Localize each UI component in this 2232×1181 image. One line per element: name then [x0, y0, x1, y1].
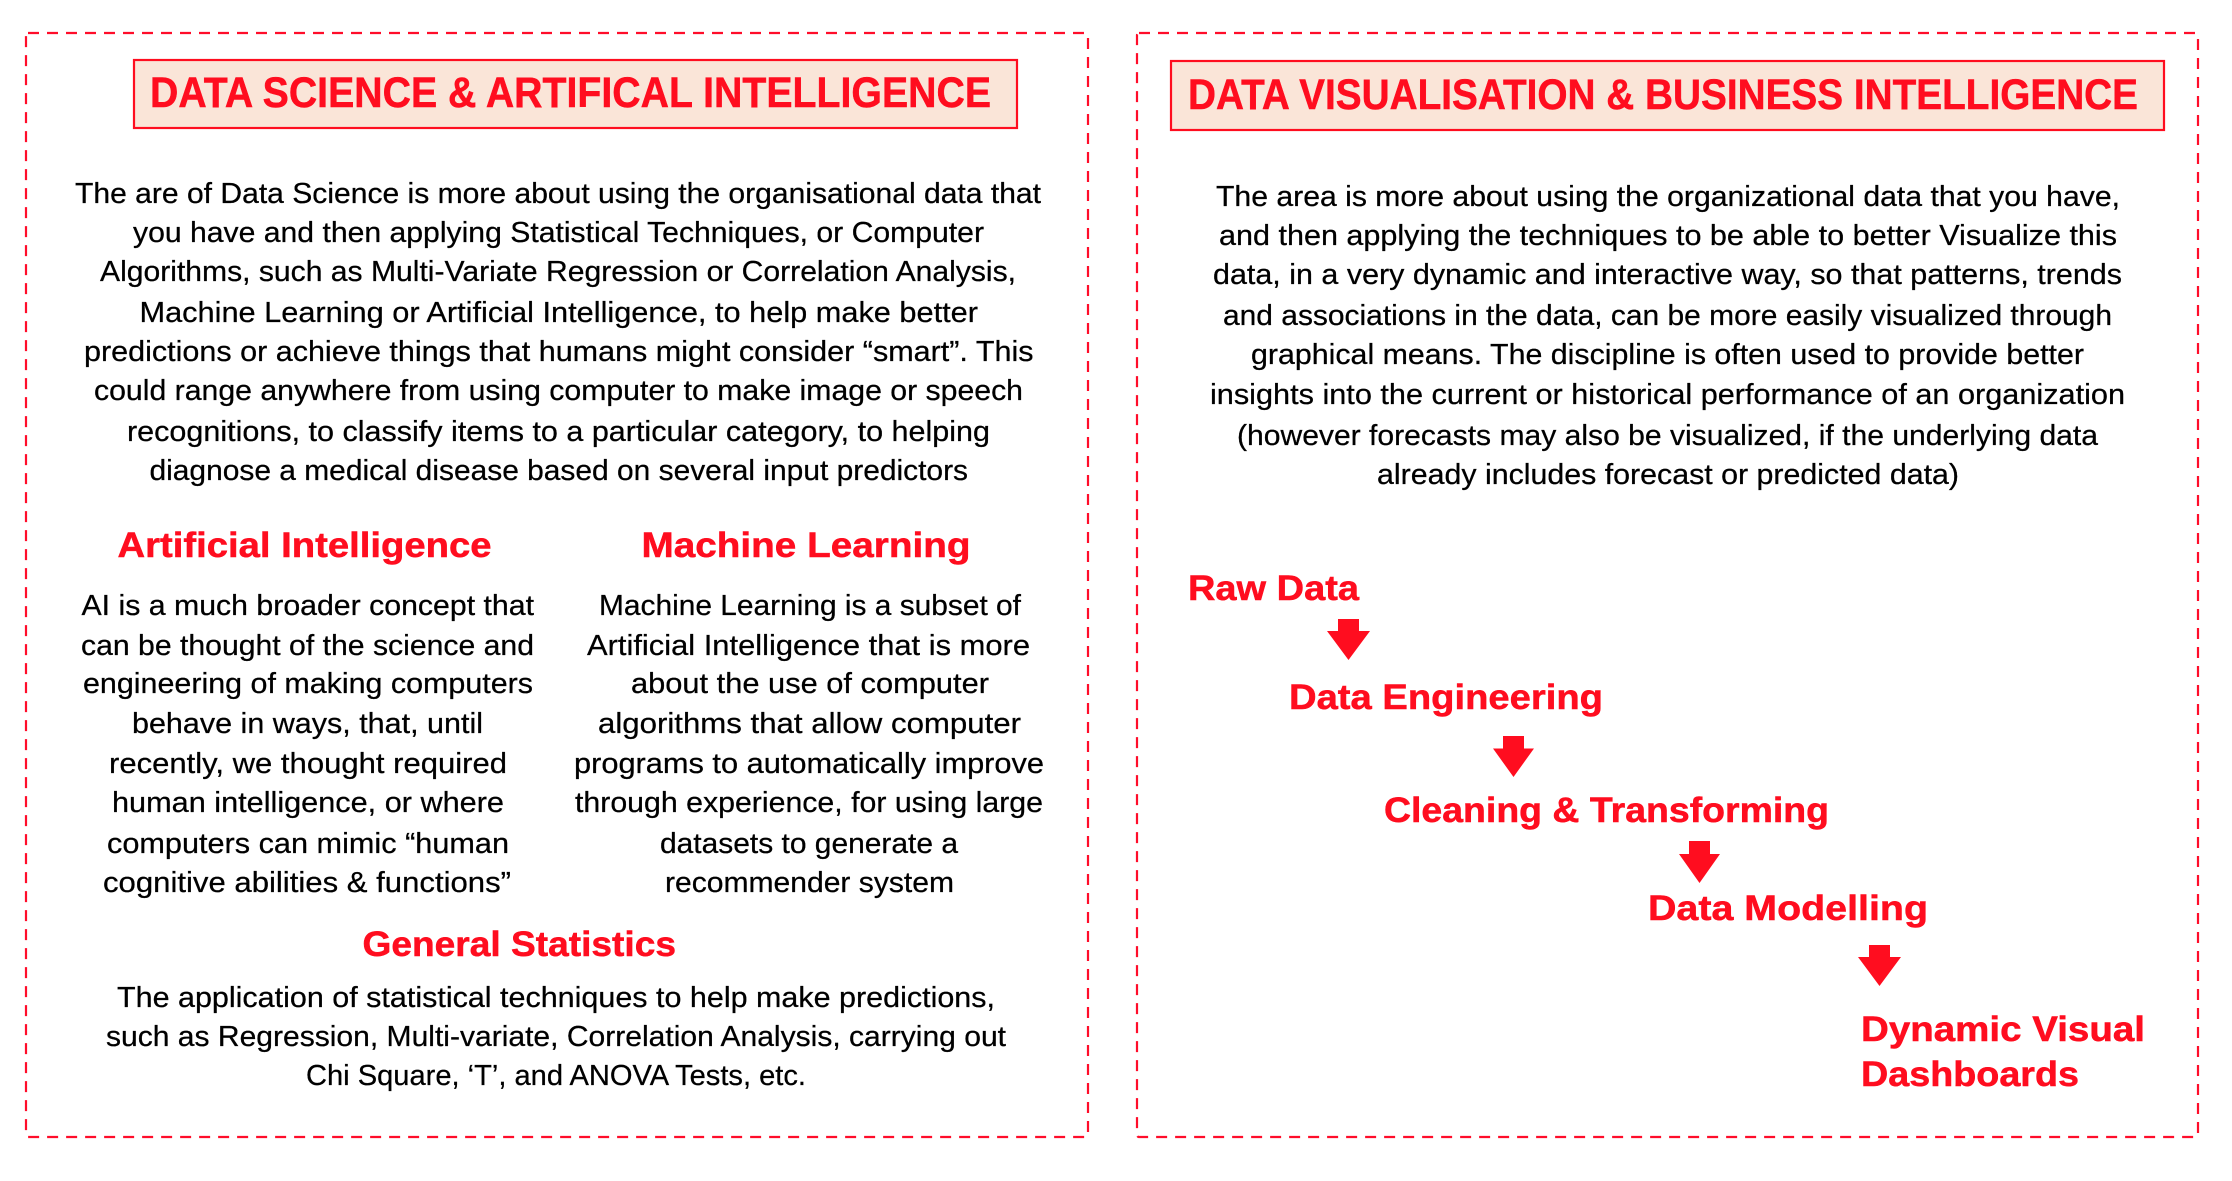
text block: data visualisation intro: The area is more about using the organizational data that you have, [1216, 181, 2120, 213]
text block: artificial intelligence description: behave in ways, that, until [132, 708, 483, 740]
heading: data visualisation and business intelligence: DATA VISUALISATION & BUSINESS INTELLIGENCE [1188, 71, 2138, 119]
text block: artificial intelligence description: engineering of making computers [83, 668, 533, 700]
arrow: data modelling to dashboards [1858, 945, 1901, 986]
text block: general statistics description [106, 982, 1006, 1092]
text block: artificial intelligence description: can be thought of the science and [81, 630, 534, 662]
text block: machine learning description: Artificial Intelligence that is more [587, 630, 1030, 662]
text block: machine learning description: programs to automatically improve [574, 748, 1044, 780]
arrow: cleaning to data modelling [1679, 841, 1720, 883]
subheading: machine learning: Machine Learning [642, 526, 970, 565]
panel: data visualisation and business intelligence [1137, 33, 2198, 1137]
text block: artificial intelligence description [81, 590, 534, 899]
text block: artificial intelligence description: human intelligence, or where [112, 787, 504, 819]
arrow: data engineering to cleaning [1493, 736, 1534, 777]
text block: data visualisation intro [1210, 181, 2125, 491]
step: dynamic visual dashboards: Dashboards [1861, 1055, 2079, 1094]
heading: data science and artificial intelligence [134, 60, 1017, 128]
text block: machine learning description: through experience, for using large [575, 787, 1043, 819]
text block: data science intro: recognitions, to classify items to a particular category, to helping [127, 416, 990, 448]
text block: data science intro: Algorithms, such as Multi-Variate Regression or Correlation Analysis, [100, 256, 1016, 288]
step: data engineering: Data Engineering [1289, 678, 1603, 717]
text block: data science intro: Machine Learning or Artificial Intelligence, to help make better [140, 297, 979, 329]
text block: artificial intelligence description: AI is a much broader concept that [82, 590, 534, 622]
flow: raw data to dashboards [1188, 569, 2145, 1094]
text block: data science intro: The are of Data Science is more about using the organisational data that [75, 178, 1041, 210]
text block: data science intro: could range anywhere from using computer to make image or speech [94, 375, 1023, 407]
text block: artificial intelligence description: recently, we thought required [109, 748, 507, 780]
step: dynamic visual dashboards [1861, 1010, 2145, 1094]
text block: data science intro: you have and then applying Statistical Techniques, or Computer [133, 217, 985, 249]
arrow: raw data to data engineering [1327, 619, 1370, 660]
text block: data visualisation intro: graphical means. The discipline is often used to provide better [1251, 339, 2085, 371]
subheading: artificial intelligence: Artificial Intelligence [118, 526, 491, 565]
text block: data visualisation intro: (however forecasts may also be visualized, if the underlying data [1237, 420, 2098, 452]
text block: machine learning description: recommender system [665, 867, 954, 899]
heading: data science and artificial intelligence: DATA SCIENCE & ARTIFICAL INTELLIGENCE [150, 69, 991, 117]
text block: machine learning description: about the use of computer [631, 668, 990, 700]
step: dynamic visual dashboards: Dynamic Visual [1861, 1010, 2145, 1049]
text block: machine learning description: Machine Learning is a subset of [599, 590, 1021, 622]
text block: data visualisation intro: already includes forecast or predicted data) [1377, 459, 1959, 491]
text block: data visualisation intro: data, in a very dynamic and interactive way, so that patterns, trends [1213, 259, 2122, 291]
text block: artificial intelligence description: computers can mimic “human [107, 828, 509, 860]
step: data modelling: Data Modelling [1648, 889, 1928, 928]
text block: machine learning description: algorithms that allow computer [598, 708, 1022, 740]
text block: data science intro: predictions or achieve things that humans might consider “smart”. This [84, 336, 1034, 368]
step: raw data: Raw Data [1188, 569, 1360, 608]
text block: data science intro: diagnose a medical disease based on several input predictors [150, 455, 968, 487]
text block: data visualisation intro: insights into the current or historical performance of an organization [1210, 379, 2125, 411]
text block: data visualisation intro: and associations in the data, can be more easily visualized through [1223, 300, 2112, 332]
step: cleaning and transforming: Cleaning & Transforming [1384, 791, 1829, 830]
text block: data visualisation intro: and then applying the techniques to be able to better Visualize this [1219, 220, 2117, 252]
text block: data science intro [75, 178, 1041, 487]
text block: machine learning description: datasets to generate a [660, 828, 958, 860]
text block: machine learning description [574, 590, 1044, 899]
text block: general statistics description: such as Regression, Multi-variate, Correlation Analysis, carrying out [106, 1021, 1006, 1053]
panel: data science and artificial intelligence [26, 33, 1088, 1137]
subheading: general statistics: General Statistics [362, 925, 676, 964]
text block: artificial intelligence description: cognitive abilities & functions” [103, 867, 511, 899]
heading: data visualisation and business intelligence [1171, 61, 2164, 130]
text block: general statistics description: The application of statistical techniques to help make predictions, [117, 982, 995, 1014]
text block: general statistics description: Chi Square, ‘T’, and ANOVA Tests, etc. [306, 1060, 806, 1092]
